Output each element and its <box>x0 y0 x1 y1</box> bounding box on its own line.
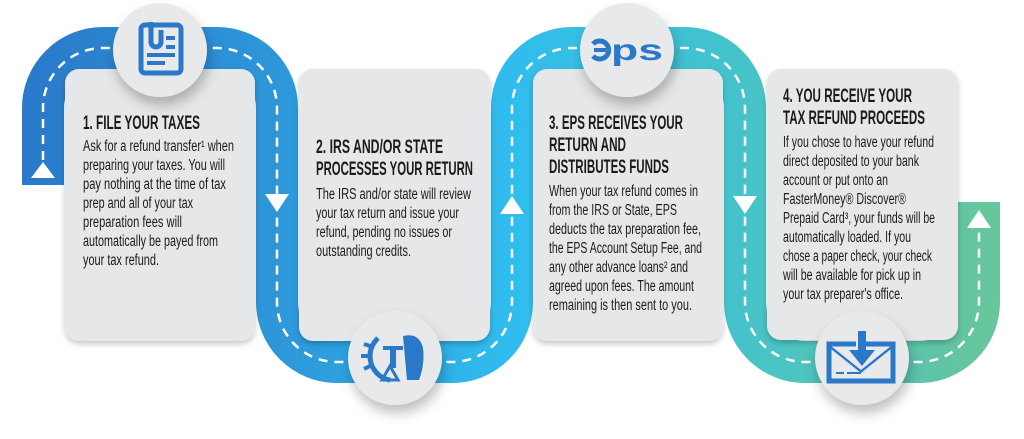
text 4: will be available for pick up in <box>782 267 921 284</box>
heading 2 <box>316 137 473 180</box>
text 2 <box>316 186 472 260</box>
panel: step 1 <box>65 69 255 341</box>
arrow: up left <box>31 162 55 178</box>
text 1: automatically be payed from <box>83 233 218 250</box>
heading 4 <box>783 86 925 129</box>
heading 1: 1. FILE YOUR TAXES <box>83 113 200 134</box>
text 1: prep and all of your tax <box>83 195 193 212</box>
arrow: up 4 <box>967 210 991 228</box>
heading 3: RETURN AND <box>549 135 626 156</box>
icon: download tray <box>815 311 909 405</box>
heading 4: TAX REFUND PROCEEDS <box>783 108 925 129</box>
heading 4: 4. YOU RECEIVE YOUR <box>783 86 912 107</box>
text 2: The IRS and/or state will review <box>316 186 472 203</box>
text 3: from the IRS or State, EPS <box>549 202 677 219</box>
text 4: account or put onto an <box>783 172 888 189</box>
panel: step 4 <box>767 69 958 340</box>
heading 3: 3. EPS RECEIVES YOUR <box>549 113 683 134</box>
text 3: remaining is then sent to you. <box>549 297 692 314</box>
text 3: any other advance loans² and <box>549 259 688 276</box>
text 3: agreed upon fees. The amount <box>549 278 694 295</box>
panel: step 2 <box>299 69 490 341</box>
text 2: outstanding credits. <box>316 243 411 260</box>
text 3 <box>549 183 702 314</box>
text 1: preparation fees will <box>83 214 182 231</box>
text 4: chose a paper check, your check <box>783 248 932 265</box>
text 4: your tax preparer's office. <box>783 286 903 303</box>
text 4: FasterMoney® Discover® <box>783 191 906 208</box>
icon: document <box>113 3 207 97</box>
heading 3: DISTRIBUTES FUNDS <box>549 157 669 178</box>
text 2: your tax return and issue your <box>316 205 459 222</box>
text 2: refund, pending no issues or <box>316 224 452 241</box>
text 3: the EPS Account Setup Fee, and <box>549 240 702 257</box>
panel: step 3 <box>533 69 723 341</box>
text 3: deducts the tax preparation fee, <box>549 221 701 238</box>
text 1: Ask for a refund transfer¹ when <box>83 138 234 155</box>
text 4: Prepaid Card³, your funds will be <box>783 210 935 227</box>
icon: EPS logo <box>580 3 674 97</box>
arrow: up 2 <box>500 196 524 214</box>
path band <box>43 48 979 362</box>
heading 2: 2. IRS AND/OR STATE <box>316 137 443 158</box>
text 4: If you chose to have your refund <box>783 134 934 151</box>
text 1: your tax refund. <box>83 252 159 269</box>
icon: EPS logo: ps <box>611 34 663 67</box>
text 4: direct deposited to your bank <box>783 153 919 170</box>
text 3: When your tax refund comes in <box>549 183 698 200</box>
arrow: down 3 <box>733 196 757 214</box>
text 1: preparing your taxes. You will <box>83 157 225 174</box>
text 4 <box>782 134 935 303</box>
heading 2: PROCESSES YOUR RETURN <box>316 159 473 180</box>
heading 3 <box>549 113 683 178</box>
text 1 <box>83 138 234 269</box>
icon: IRS eagle <box>348 311 442 405</box>
text 1: pay nothing at the time of tax <box>83 176 226 193</box>
arrow: down 1 <box>265 194 289 212</box>
text 4: automatically loaded. If you <box>783 229 911 246</box>
